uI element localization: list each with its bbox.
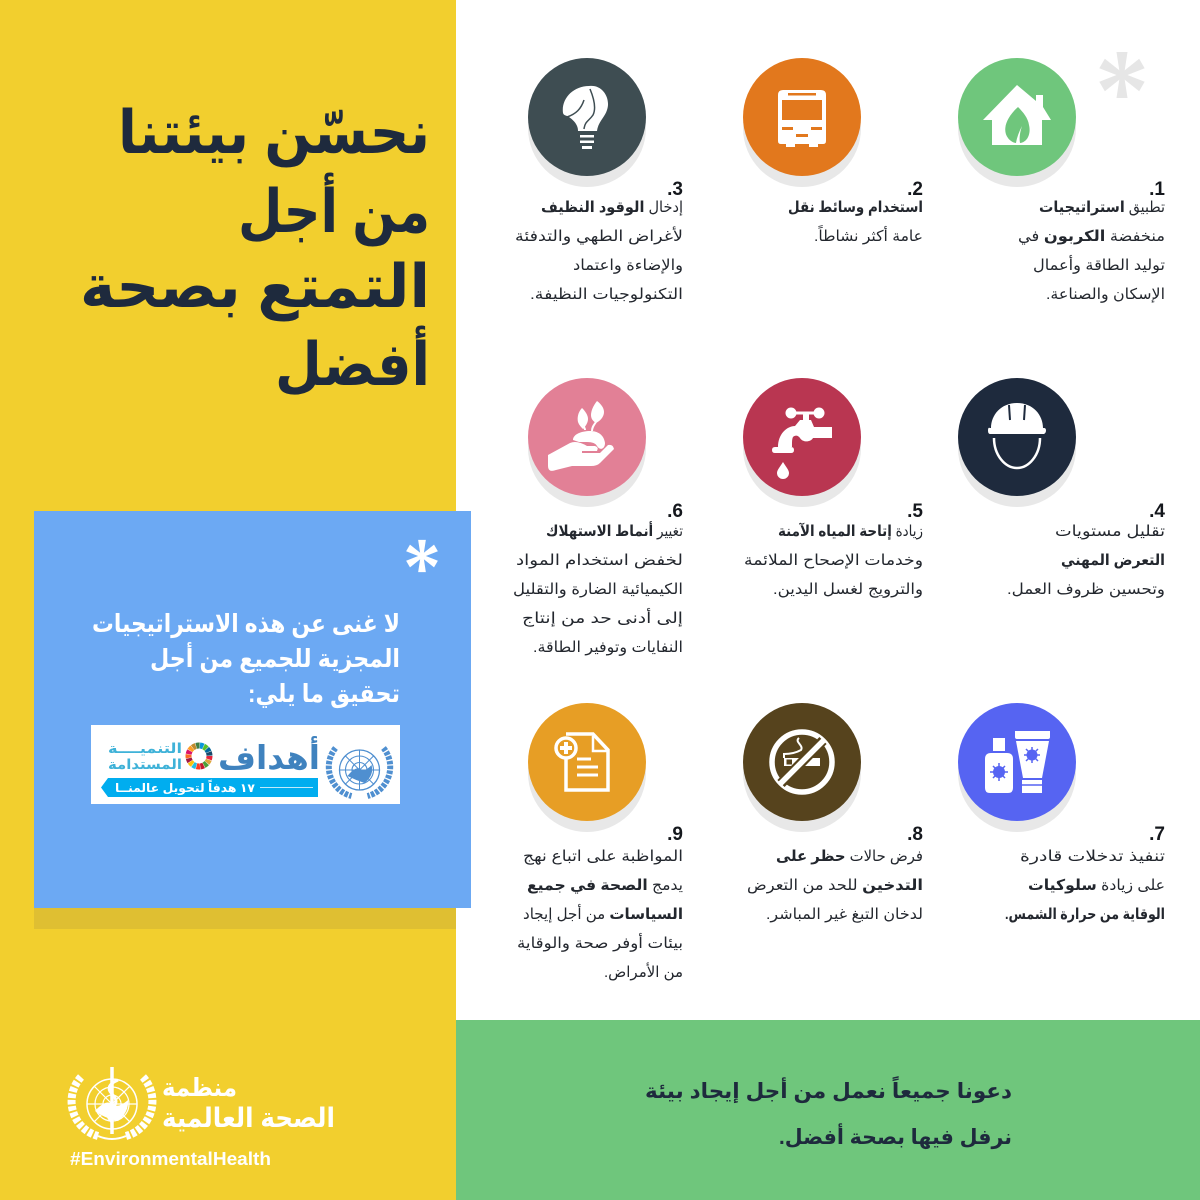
text xyxy=(744,522,923,598)
WHO logo xyxy=(70,1067,335,1169)
icon: hand with sprout xyxy=(528,378,646,507)
footer message: دعونا جميعاً نعمل من أجل إيجاد بيئة xyxy=(645,1075,1012,1103)
hashtag: #EnvironmentalHealth xyxy=(70,1149,271,1169)
organisation name: الصحة العالمية xyxy=(162,1103,335,1133)
banner xyxy=(101,778,318,797)
callout text: المجزية للجميع من أجل xyxy=(150,642,400,674)
text: تنفيذ تدخلات قادرة xyxy=(1020,848,1165,865)
text xyxy=(1005,848,1165,923)
icon: bus xyxy=(743,58,861,187)
text xyxy=(747,848,923,923)
icon: house with leaf xyxy=(958,58,1076,187)
number: .1 xyxy=(1149,179,1165,200)
text: إدخال الوقود النظيف xyxy=(541,199,683,216)
text: التكنولوجيات النظيفة. xyxy=(530,286,683,303)
panel: blue callout xyxy=(34,511,471,929)
number: .9 xyxy=(667,824,683,845)
number: .6 xyxy=(667,501,683,522)
item 6 xyxy=(513,378,683,656)
title: من أجل xyxy=(238,172,430,247)
goals heading: أهداف xyxy=(218,736,320,776)
banner: ١٧ هدفاً لتحويل عالمنــا xyxy=(115,779,256,796)
icon: water tap xyxy=(743,378,861,507)
text: تطبيق استراتيجيات xyxy=(1039,199,1165,216)
text xyxy=(513,521,683,656)
footer message xyxy=(645,1075,1012,1149)
title: أفضل xyxy=(275,325,430,398)
text: وتحسين ظروف العمل. xyxy=(1007,581,1165,598)
number: .7 xyxy=(1149,824,1165,845)
text xyxy=(515,199,683,303)
text: استخدام وسائط نقل xyxy=(788,199,923,216)
text: منخفضة الكربون في xyxy=(1018,228,1165,246)
title xyxy=(80,99,430,398)
text: عامة أكثر نشاطاً. xyxy=(814,225,923,245)
icon: SDG wheel xyxy=(188,746,210,766)
text: تغيير أنماط الاستهلاك xyxy=(546,521,683,540)
text: من الأمراض. xyxy=(604,962,683,981)
text: المواظبة على اتباع نهج xyxy=(523,848,683,865)
text: والترويج لغسل اليدين. xyxy=(773,581,923,598)
text: وخدمات الإصحاح الملائمة xyxy=(744,552,923,569)
text xyxy=(788,199,923,245)
text: والإضاءة واعتماد xyxy=(573,257,683,274)
icon: white asterisk xyxy=(406,540,438,572)
item 2 xyxy=(743,58,923,245)
text: تقليل مستويات xyxy=(1055,523,1165,540)
text: توليد الطاقة وأعمال xyxy=(1033,255,1165,274)
number: .5 xyxy=(907,501,923,522)
text: إلى أدنى حد من إنتاج xyxy=(522,608,683,628)
icon: UN emblem xyxy=(329,748,390,796)
organisation name: منظمة xyxy=(162,1074,237,1102)
panel: green footer band xyxy=(456,1020,1200,1200)
callout text: تحقيق ما يلي: xyxy=(248,680,400,709)
number: .3 xyxy=(667,179,683,200)
icon: WHO emblem xyxy=(72,1067,152,1139)
organisation name xyxy=(162,1074,335,1133)
icon: bulb with leaf xyxy=(528,58,646,187)
item 3 xyxy=(515,58,683,303)
title: نحسّن بيئتنا xyxy=(118,99,430,168)
item 8 xyxy=(743,703,923,923)
footer message: نرفل فيها بصحة أفضل. xyxy=(779,1122,1012,1149)
callout text xyxy=(92,610,400,709)
text xyxy=(1018,199,1165,303)
callout text: لا غنى عن هذه الاستراتيجيات xyxy=(92,610,400,639)
text xyxy=(517,848,683,981)
SDG logo xyxy=(91,725,400,804)
number: .2 xyxy=(907,179,923,200)
icon: grey asterisk xyxy=(1099,52,1145,98)
text xyxy=(1007,523,1165,598)
text: فرض حالات حظر على xyxy=(776,848,923,865)
item 1 xyxy=(958,58,1165,303)
sustainable development text xyxy=(108,740,182,772)
text: السياسات من أجل إيجاد xyxy=(523,904,683,923)
text: الكيميائية الضارة والتقليل xyxy=(513,581,683,598)
item 4 xyxy=(958,378,1165,598)
number: .4 xyxy=(1149,501,1165,522)
text: الإسكان والصناعة. xyxy=(1046,286,1165,303)
item 7 xyxy=(958,703,1165,923)
panel: yellow sidebar xyxy=(0,0,456,1200)
text: يدمج الصحة في جميع xyxy=(527,877,683,894)
sustainable development text: المستدامة xyxy=(108,756,182,772)
icon: no smoking xyxy=(743,703,861,832)
text: لأغراض الطهي والتدفئة xyxy=(515,226,683,246)
icon: document with plus xyxy=(528,703,646,832)
item 9 xyxy=(517,703,683,981)
text: زيادة إتاحة المياه الآمنة xyxy=(778,522,923,540)
icon: sunscreen xyxy=(958,703,1076,832)
item 5 xyxy=(743,378,923,598)
text: لخفض استخدام المواد xyxy=(516,552,683,569)
text: لدخان التبغ غير المباشر. xyxy=(766,906,923,923)
text: الوقاية من حرارة الشمس. xyxy=(1005,906,1165,923)
number: .8 xyxy=(907,824,923,845)
text: التعرض المهني xyxy=(1061,552,1165,569)
text: التدخين للحد من التعرض xyxy=(747,877,923,894)
text: بيئات أوفر صحة والوقاية xyxy=(517,933,683,952)
text: على زيادة سلوكيات xyxy=(1028,877,1165,894)
text: النفايات وتوفير الطاقة. xyxy=(533,639,683,656)
icon: hard hat xyxy=(958,378,1076,507)
title: التمتع بصحة xyxy=(80,253,430,322)
sustainable development text: التنميــــة xyxy=(108,740,182,756)
